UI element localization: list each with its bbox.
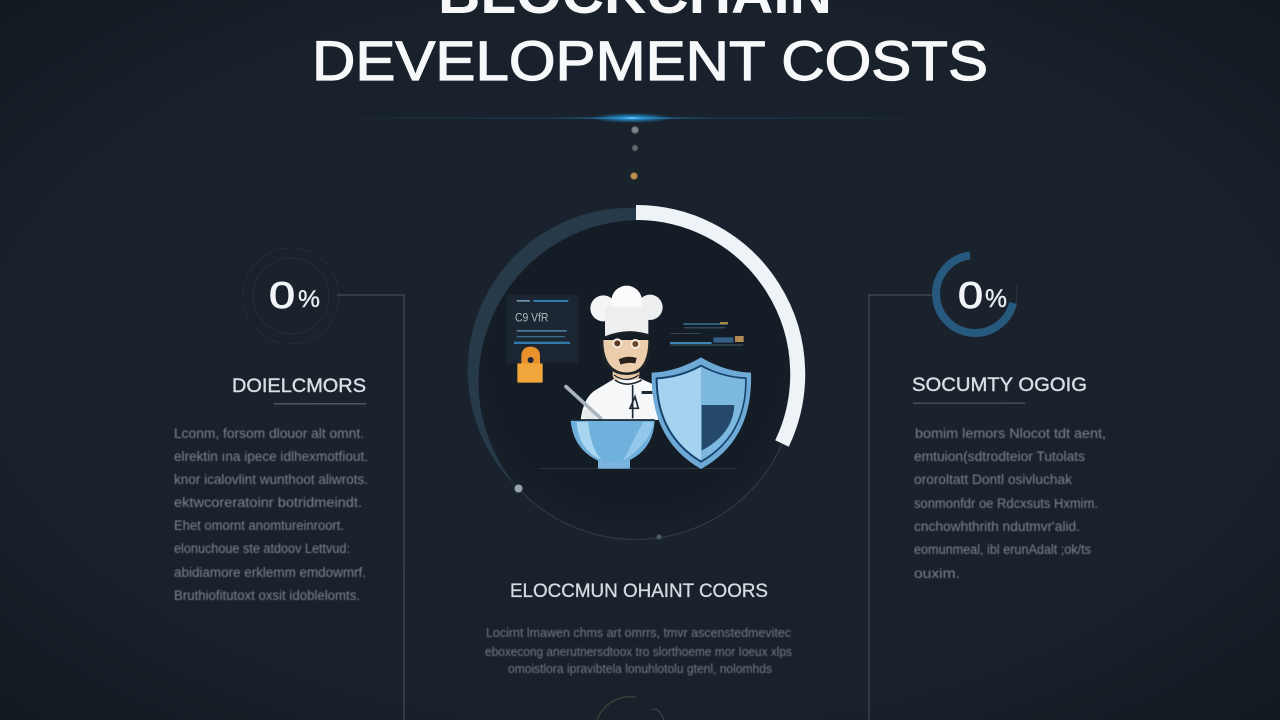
center panel: heading and body: ELOCCMUN OHAINT COORS [510,581,768,602]
icon: shield [652,357,751,469]
bowl [571,420,655,469]
spoon [566,387,601,418]
left connector line [337,295,404,720]
illustration: chef with bowl and shield [507,286,751,469]
right gauge: 0%: 0 [958,275,983,316]
left panel: heading and body: abidiamore erklemm emdowmrf. [174,565,366,580]
right panel: heading and body: ouxim. [914,566,960,581]
data panel [507,295,578,363]
right panel: heading and body: sonmonfdr oe Rdcxsuts Hxmim. [914,496,1098,511]
left panel: heading and body: ektwcoreratoinr botridmeindt. [174,495,362,510]
dotted vertical connector [630,126,638,180]
right gauge: 0% [936,255,1017,333]
right panel: heading and body: eomunmeal, ibl erunAdalt ;ok/ts [914,542,1091,557]
data lines [670,322,744,345]
floor line [540,467,737,470]
left panel: heading and body: elrektin ına ipece idlhexmotfiout. [174,449,368,464]
right connector line [869,295,932,720]
data panel: C9 VfR [515,310,549,324]
title [312,0,988,92]
left panel: heading and body [174,376,368,603]
title: DEVELOPMENT COSTS [312,29,988,92]
left panel: heading and body: elonuchoue ste atdoov Lettvud: [174,541,350,556]
left panel: heading and body: knor icalovlint wunthoot aliwrots. [174,472,368,487]
right panel: heading and body: ororoltatt Dontl osivluchak [914,472,1072,487]
center panel: heading and body [485,581,792,676]
center panel: heading and body: Locirnt lmawen chms art omrrs, tmvr ascenstedmevitec [486,625,791,640]
right panel: heading and body [912,375,1106,581]
left gauge: 0% [243,248,339,344]
right gauge: 0%: % [985,285,1007,313]
left gauge: 0%: % [298,286,320,313]
bottom gauge partially cut off [597,697,664,720]
icon: padlock [517,347,543,383]
left panel: heading and body: DOIELCMORS [232,376,366,397]
left panel: heading and body: Lconm, forsom dlouor alt omnt. [174,426,364,441]
left gauge: 0%: 0 [269,275,295,316]
right panel: heading and body: cnchowhthrith ndutmvr'alid. [914,519,1080,534]
right panel: heading and body: bomim lemors Nlocot tdt aent, [915,426,1106,441]
center panel: heading and body: eboxecong anerutnersdtoox tro slorthoeme mor Ioeux xlps [485,644,792,659]
chef [581,286,663,420]
left panel: heading and body: Bruthiofitutoxt oxsit idoblelomts. [174,588,360,603]
center panel: heading and body: omoistlora ipravibtela lonuhlotolu gtenl, nolomhds [508,661,772,676]
right panel: heading and body: emtuion(sdtrodteior Tutolats [914,449,1085,464]
central ring chart [468,208,798,540]
left panel: heading and body: Ehet omornt anomtureinroort. [174,518,344,533]
glowing title divider [300,113,964,123]
right panel: heading and body: SOCUMTY OGOIG [912,375,1087,396]
